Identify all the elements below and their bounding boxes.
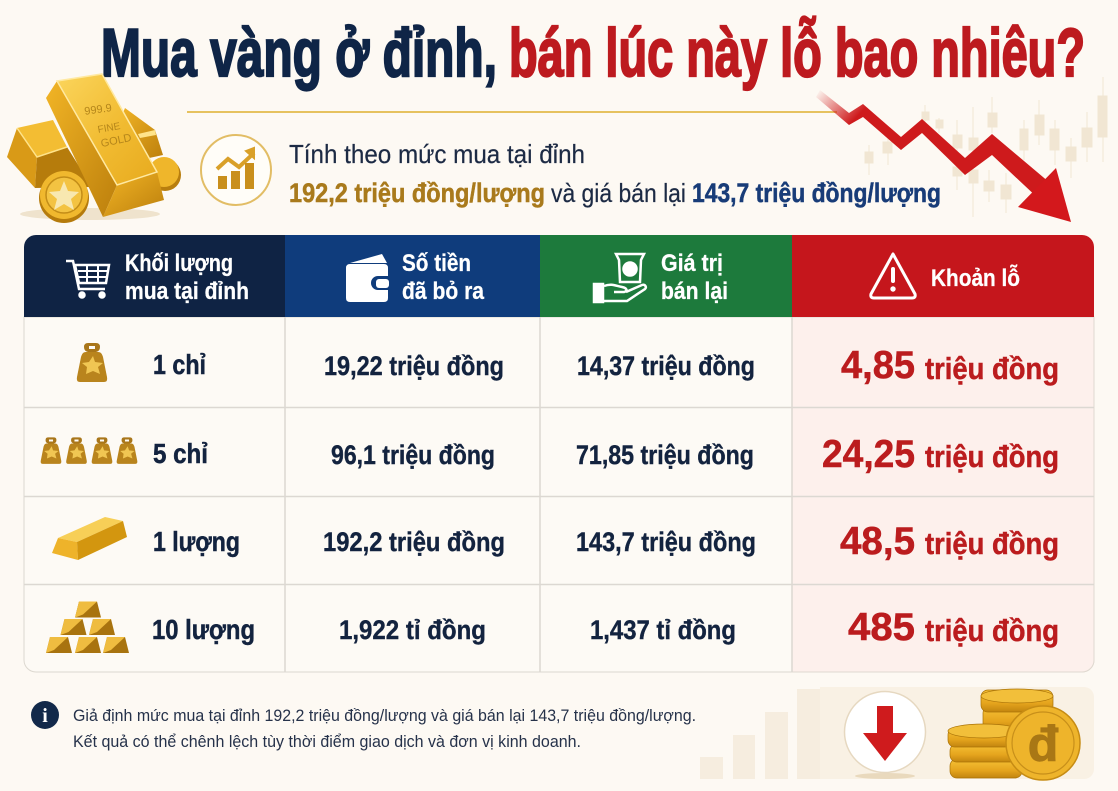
row: 1 chỉ: 19,22 triệu đồng (324, 351, 504, 381)
main bar left face (46, 81, 117, 217)
row: 5 chỉ: 24,25 (822, 433, 915, 476)
header: money spent (285, 235, 540, 317)
subtitle text (289, 139, 941, 208)
main bar top face (57, 74, 157, 185)
row: 1 lượng: 192,2 triệu đồng (323, 527, 505, 557)
row: 10 lượng: 1,437 tỉ đồng (590, 615, 736, 645)
left coin (39, 173, 89, 223)
icon: four gold weights (41, 437, 137, 464)
header: loss (792, 235, 1094, 317)
icon: warning triangle (871, 254, 915, 298)
row: 1 chỉ: 1 chỉ (153, 349, 206, 380)
icon: gold bars and coins: 999.9 (84, 102, 113, 118)
icon: gold coin stacks: đ (1028, 716, 1059, 772)
header: weight: Khối lượng (125, 250, 233, 277)
decorative candlestick chart (865, 77, 1107, 217)
icon: gold coin stacks (948, 689, 1080, 780)
row: 1 chỉ: 4,85 (841, 344, 915, 387)
icon: down arrow in circle (844, 692, 926, 779)
header: resale value: Giá trị (661, 250, 723, 277)
row: 1 lượng (52, 517, 1059, 563)
top stack (981, 689, 1053, 731)
icon: gold bars and coins: FINE (97, 121, 122, 136)
header: weight: mua tại đỉnh (125, 278, 249, 305)
row: 10 lượng: 10 lượng (152, 614, 255, 645)
main bar front face (103, 172, 164, 217)
footnote: Kết quả có thể chênh lệch tùy thời điểm giao dịch và đơn vị kinh doanh. (73, 732, 581, 751)
gold divider line (187, 111, 837, 113)
header: loss: Khoản lỗ (931, 264, 1020, 292)
soft shadow (20, 208, 160, 220)
icon: rising chart in circle (201, 135, 271, 205)
row: 1 chỉ: triệu đồng (925, 351, 1059, 386)
row: 1 lượng: 48,5 (840, 520, 915, 563)
title (101, 15, 1085, 91)
table grid lines (24, 317, 1094, 672)
panel: table (24, 235, 1094, 672)
header: resale value: bán lại (661, 278, 728, 305)
right coin (149, 159, 181, 191)
row: 10 lượng: 485 (848, 606, 915, 649)
icon: info (31, 701, 59, 729)
icon: gold bar pyramid (46, 602, 129, 653)
icon: gold bar (52, 517, 127, 560)
arrow: falling red zigzag (816, 90, 1071, 222)
large dong coin (1006, 706, 1080, 780)
row: 1 lượng: 143,7 triệu đồng (576, 527, 756, 557)
title: Mua vàng ở đỉnh, (101, 15, 497, 91)
row: 5 chỉ: 5 chỉ (153, 438, 208, 469)
icon: shopping cart (66, 261, 109, 298)
header: money spent: đã bỏ ra (402, 278, 485, 305)
left back bar (17, 120, 67, 157)
subtitle text: 192,2 triệu đồng/lượng (289, 178, 545, 208)
subtitle text: Tính theo mức mua tại đỉnh (289, 139, 585, 169)
icon: gold weight (77, 343, 107, 382)
icon: gold bars and coins: GOLD (100, 132, 133, 150)
subtitle text: 143,7 triệu đồng/lượng (692, 178, 941, 208)
footnote (73, 706, 696, 751)
header: money spent: Số tiền (402, 250, 471, 277)
row: 5 chỉ: 96,1 triệu đồng (331, 440, 495, 470)
footnote: Giả định mức mua tại đỉnh 192,2 triệu đồng/lượng và giá bán lại 143,7 triệu đồng/lượng. (73, 706, 696, 725)
lower stack (948, 724, 1022, 778)
icon: hand holding money (594, 254, 646, 302)
header: resale value (540, 235, 792, 317)
icon: gold bars and coins (7, 74, 181, 223)
row: 1 lượng: 1 lượng (153, 526, 240, 557)
row: 10 lượng: 1,922 tỉ đồng (339, 615, 486, 645)
row: 10 lượng: triệu đồng (925, 613, 1059, 648)
row: 5 chỉ: 71,85 triệu đồng (576, 440, 754, 470)
icon: wallet (346, 254, 389, 302)
table body background (24, 317, 1094, 672)
subtitle text: và giá bán lại (551, 178, 686, 208)
row: 10 lượng (46, 602, 1059, 653)
row: 1 chỉ (77, 343, 1059, 387)
loss column background (792, 317, 1094, 672)
row: 5 chỉ: triệu đồng (925, 439, 1059, 474)
row: 1 lượng: triệu đồng (925, 526, 1059, 561)
right back bar (118, 108, 163, 160)
row: 5 chỉ (41, 433, 1059, 476)
decorative bottom bars and band (700, 687, 1094, 779)
icon: info: i (42, 705, 48, 727)
row: 1 chỉ: 14,37 triệu đồng (577, 351, 755, 381)
header: weight (24, 235, 285, 317)
